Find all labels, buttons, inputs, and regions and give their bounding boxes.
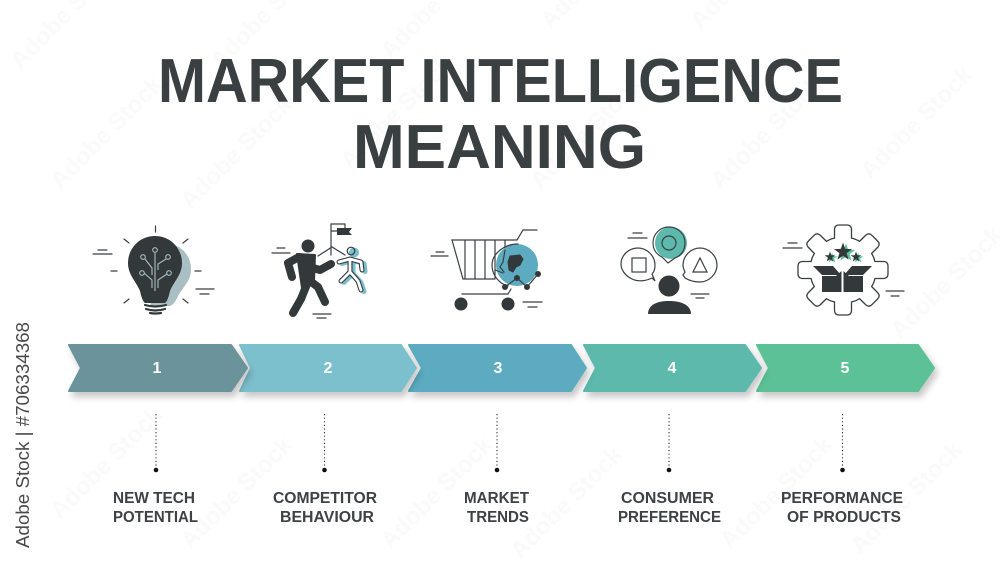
watermark pattern: Adobe Stock xyxy=(335,51,458,174)
icon: gear with product box and stars xyxy=(783,225,904,315)
watermark pattern: Adobe Stock xyxy=(705,71,828,194)
arrow 5 xyxy=(757,345,934,391)
connector 4 xyxy=(667,414,671,472)
label 3: MARKET xyxy=(464,490,530,507)
title xyxy=(158,47,843,182)
title: MARKET INTELLIGENCE xyxy=(158,47,843,116)
icon: competitor figures with flag xyxy=(272,224,365,318)
watermark pattern: Adobe Stock xyxy=(505,441,628,563)
label 1: NEW TECH xyxy=(113,490,195,507)
watermark pattern: Adobe Stock xyxy=(855,61,978,184)
connector 3 xyxy=(495,414,499,472)
watermark pattern: Adobe Stock xyxy=(845,436,968,559)
arrow 1 xyxy=(69,345,247,391)
connector 5 xyxy=(840,414,845,472)
label 5: OF PRODUCTS xyxy=(787,509,901,526)
watermark pattern: Adobe Stock xyxy=(175,431,298,554)
watermark pattern: Adobe Stock xyxy=(375,431,498,554)
label 5: PERFORMANCE xyxy=(781,490,903,507)
label 5 xyxy=(781,490,903,526)
watermark pattern: Adobe Stock xyxy=(45,71,168,194)
arrow 5: 5 xyxy=(841,360,850,377)
title: MEANING xyxy=(353,113,646,182)
label 2: COMPETITOR xyxy=(273,490,377,507)
label 1: POTENTIAL xyxy=(113,509,198,526)
label 2: BEHAVIOUR xyxy=(280,509,374,526)
watermark pattern: Adobe Stock xyxy=(525,71,648,194)
icon: shopping cart with globe xyxy=(431,230,542,310)
label 1 xyxy=(113,490,198,526)
arrow 4: 4 xyxy=(668,360,677,377)
small teal figure xyxy=(339,247,365,292)
connector 2 xyxy=(322,414,327,472)
watermark pattern: Adobe Stock xyxy=(45,401,168,524)
label 3 xyxy=(464,490,530,526)
icon: consumer with speech bubbles xyxy=(621,227,717,314)
connector 1 xyxy=(154,414,158,472)
box xyxy=(813,266,872,292)
arrow 2 xyxy=(240,345,416,391)
label 4 xyxy=(618,490,721,526)
watermark pattern: Adobe Stock xyxy=(175,91,298,214)
arrow 3 xyxy=(409,345,586,391)
label 2 xyxy=(273,490,377,526)
flag xyxy=(318,224,352,256)
arrow 1: 1 xyxy=(153,360,162,377)
label 4: CONSUMER xyxy=(621,490,714,507)
label 3: TRENDS xyxy=(467,509,529,526)
stock id side text: Adobe Stock | #706334368 xyxy=(13,322,33,548)
arrow 3: 3 xyxy=(494,360,503,377)
icon: light bulb with circuit xyxy=(93,226,214,314)
arrow 4 xyxy=(584,345,761,391)
stars xyxy=(825,242,863,262)
watermark pattern: Adobe Stock xyxy=(715,431,838,554)
label 4: PREFERENCE xyxy=(618,509,721,526)
large runner xyxy=(288,240,331,313)
arrow 2: 2 xyxy=(324,360,333,377)
